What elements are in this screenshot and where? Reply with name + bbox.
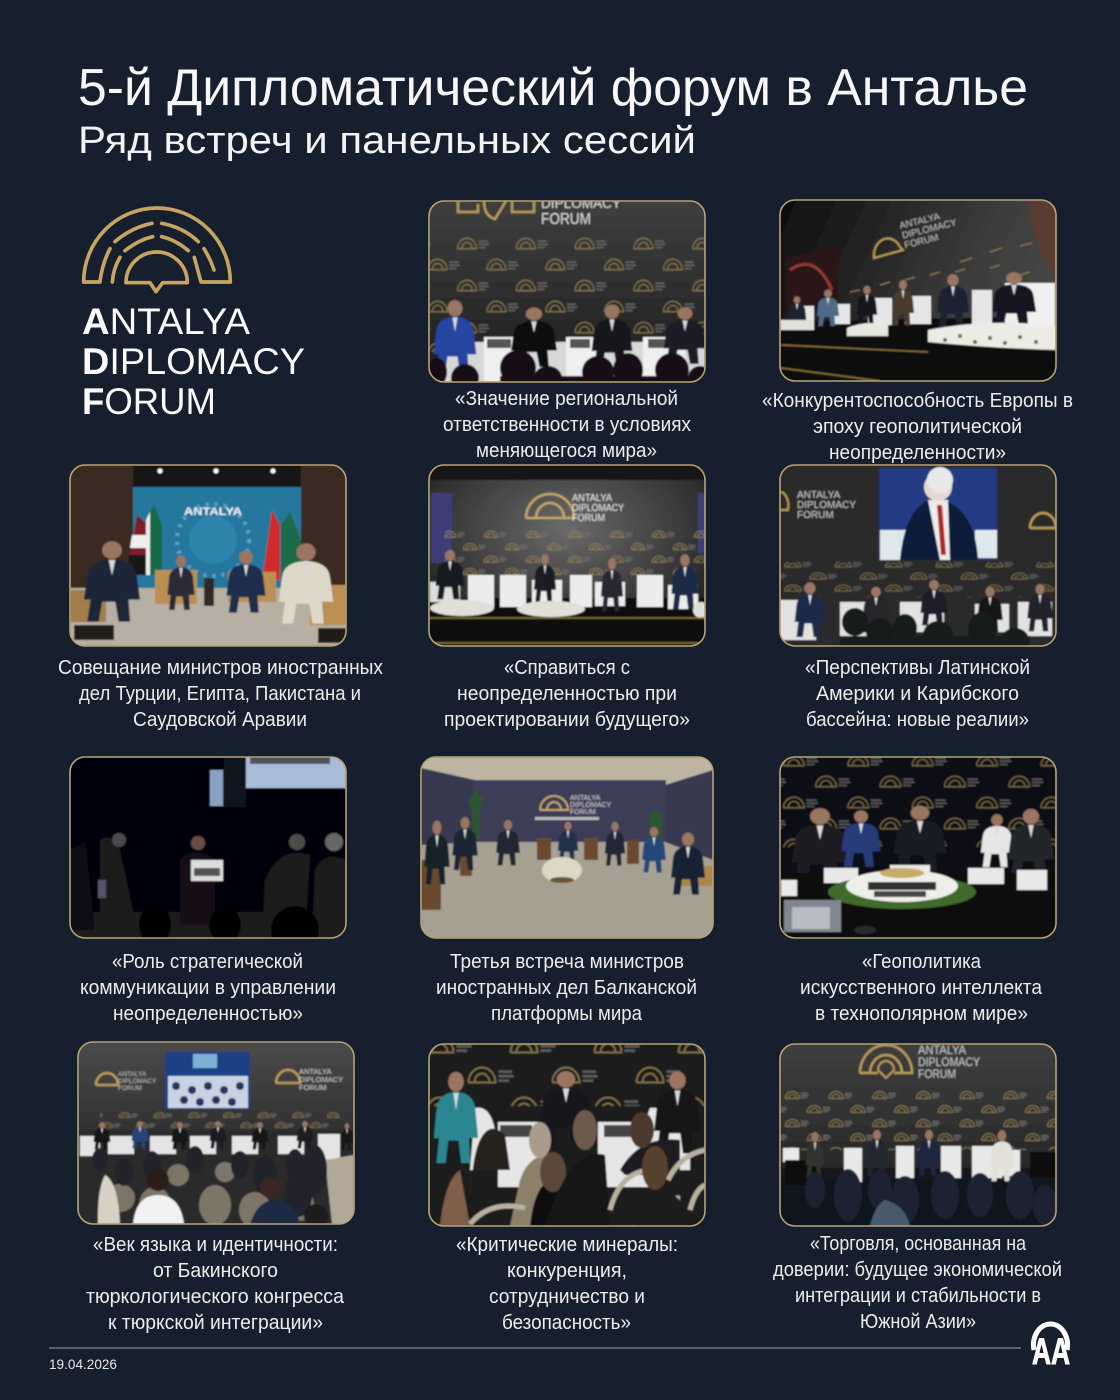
caption: trust-based trade (773, 1232, 1062, 1333)
photo: coping with uncertainty (429, 465, 709, 646)
photo: Balkan Peace Platform meeting: FORUM (570, 809, 596, 816)
photo: panel, Europe competitiveness: FORUM (903, 232, 940, 251)
caption: critical minerals: безопасность» (502, 1311, 631, 1334)
caption: geopolitics of AI: «Геополитика (862, 950, 982, 973)
caption: coping with uncertainty: неопределенностью при (457, 682, 677, 705)
photo: age of language and identity: ANTALYA (299, 1067, 332, 1076)
caption: Europe competitiveness: эпоху геополитической (813, 415, 1022, 438)
caption: critical minerals: «Критические минералы: (456, 1233, 678, 1256)
caption: foreign ministers meeting: Саудовской Аравии (133, 708, 307, 731)
photo: coping with uncertainty: FORUM (572, 512, 605, 524)
caption: foreign ministers meeting: дел Турции, Египта, Пакистана и (79, 682, 361, 705)
photo: Latin America prospects: ANTALYA (797, 490, 841, 501)
photo: Balkan Peace Platform meeting (421, 757, 713, 938)
caption: Europe competitiveness: «Конкурентоспособность Европы в (762, 389, 1073, 412)
photo: coping with uncertainty: ANTALYA (572, 492, 612, 504)
photo: trust-based trade panel (780, 1043, 1057, 1226)
photo: foreign ministers meeting: ANTALYA (184, 506, 242, 518)
caption: regional responsibility: меняющегося мира» (476, 439, 657, 462)
subtitle: Ряд встреч и панельных сессий (78, 120, 696, 162)
caption: geopolitics of AI (800, 950, 1043, 1025)
caption: trust-based trade: интеграции и стабильности в (795, 1284, 1041, 1307)
photo: panel, Europe competitiveness: DIPLOMACY (901, 217, 958, 242)
logo wordmark: DIPLOMACY (82, 341, 305, 382)
caption: Europe competitiveness: неопределенности» (829, 441, 1006, 464)
icon: Anadolu Agency logo: AA (1032, 1331, 1070, 1372)
caption: regional responsibility: «Значение региональной (455, 387, 678, 410)
photo: age of language and identity: DIPLOMACY (118, 1078, 157, 1085)
caption: trust-based trade: Южной Азии» (860, 1310, 976, 1333)
caption: foreign ministers meeting: Совещание министров иностранных (58, 656, 384, 679)
caption: Latin America prospects (805, 656, 1030, 731)
photo: panel, regional responsibility: DIPLOMACY (541, 195, 622, 211)
caption: trust-based trade: доверии: будущее экономической (773, 1258, 1062, 1281)
caption: coping with uncertainty: «Справиться с (504, 656, 630, 679)
logo wordmark (82, 301, 305, 422)
caption: regional responsibility (443, 387, 692, 462)
caption: strategic communication: коммуникации в управлении (80, 976, 336, 999)
photo: Latin America prospects: DIPLOMACY (797, 500, 856, 511)
photo: Balkan Peace Platform meeting: DIPLOMACY (570, 802, 612, 809)
caption: strategic communication: «Роль стратегической (112, 950, 303, 973)
caption: Latin America prospects: Америки и Карибского (816, 682, 1019, 705)
photo: coping with uncertainty: DIPLOMACY (572, 502, 624, 514)
title: 5-й Дипломатический форум в Анталье (78, 59, 1028, 117)
caption: critical minerals: сотрудничество и (489, 1285, 645, 1308)
caption: Balkan Peace Platform meeting (436, 950, 697, 1025)
caption: regional responsibility: ответственности в условиях (443, 413, 692, 436)
video screen (879, 467, 997, 560)
photo: trust-based trade panel: DIPLOMACY (918, 1055, 980, 1069)
caption: Latin America prospects: «Перспективы Латинской (805, 656, 1030, 679)
caption: age of language and identity (86, 1233, 345, 1334)
photo: panel, Europe competitiveness: ANTALYA (898, 211, 942, 232)
photo: geopolitics of AI roundtable (780, 757, 1056, 938)
caption: Europe competitiveness (762, 389, 1073, 464)
caption: strategic communication (80, 950, 336, 1025)
photo: trust-based trade panel: ANTALYA (918, 1043, 966, 1057)
icon: golden amphitheatre arch (84, 208, 230, 292)
logo wordmark: FORUM (82, 381, 216, 422)
photo: panel, regional responsibility: FORUM (541, 211, 591, 228)
photo: age of language and identity (78, 1042, 354, 1228)
date: 19.04.2026 (49, 1356, 117, 1372)
caption: geopolitics of AI: в технополярном мире» (815, 1002, 1028, 1025)
caption: age of language and identity: к тюркской интеграции» (108, 1311, 323, 1334)
caption: trust-based trade: «Торговля, основанная на (810, 1232, 1027, 1255)
caption: age of language and identity: «Век языка и идентичности: (93, 1233, 338, 1256)
caption: Latin America prospects: бассейна: новые реалии» (806, 708, 1029, 731)
photo: age of language and identity: DIPLOMACY (299, 1075, 343, 1084)
caption: coping with uncertainty (444, 656, 690, 731)
photo: age of language and identity: ANTALYA (118, 1071, 147, 1078)
caption: geopolitics of AI: искусственного интеллекта (800, 976, 1043, 999)
photo: Balkan Peace Platform meeting: ANTALYA (570, 795, 601, 802)
photo: age of language and identity: FORUM (299, 1083, 326, 1092)
photo: critical minerals panel (429, 1044, 705, 1226)
caption: foreign ministers meeting (58, 656, 384, 731)
caption: Balkan Peace Platform meeting: платформы мира (491, 1002, 643, 1025)
photo: Latin America prospects: FORUM (797, 510, 834, 521)
photo: Latin America prospects (780, 465, 1056, 652)
caption: Balkan Peace Platform meeting: Третья встреча министров (450, 950, 684, 973)
caption: critical minerals (456, 1233, 678, 1334)
caption: age of language and identity: от Бакинского (153, 1259, 278, 1282)
photo: panel, Europe competitiveness (780, 200, 1056, 381)
logo: Antalya Diplomacy Forum (82, 208, 305, 422)
caption: strategic communication: неопределенностью» (113, 1002, 303, 1025)
photo: age of language and identity: FORUM (118, 1085, 142, 1092)
photo: panel, regional responsibility (427, 195, 712, 392)
logo wordmark: ANTALYA (82, 301, 250, 342)
icon: Anadolu Agency logo (1032, 1324, 1070, 1372)
caption: age of language and identity: тюркологического конгресса (86, 1285, 345, 1308)
caption: critical minerals: конкуренция, (507, 1259, 627, 1282)
photo: foreign ministers meeting (70, 465, 346, 646)
caption: coping with uncertainty: проектировании будущего» (444, 708, 690, 731)
photo: strategic communication, dark stage (70, 757, 346, 954)
photo: trust-based trade panel: FORUM (918, 1067, 956, 1081)
caption: Balkan Peace Platform meeting: иностранных дел Балканской (436, 976, 697, 999)
